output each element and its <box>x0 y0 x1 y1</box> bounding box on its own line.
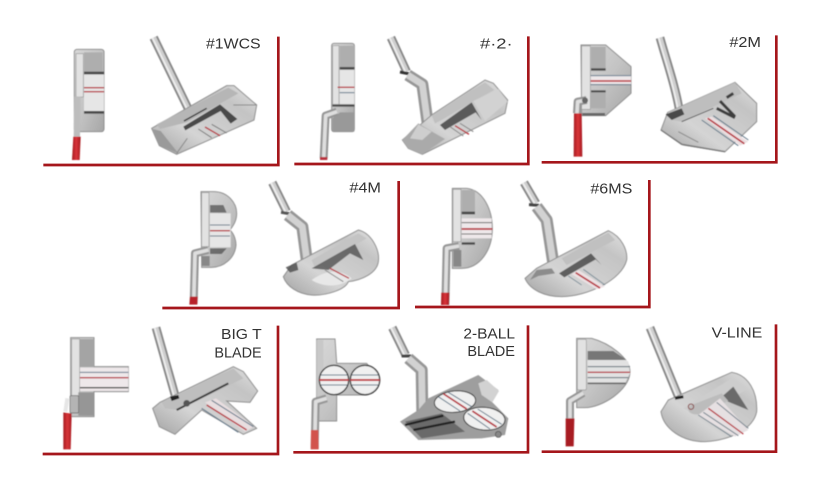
icon: V-LINE perspective view <box>649 328 757 442</box>
icon: #2M front view <box>574 45 631 157</box>
icon: #·2· perspective view <box>390 38 508 154</box>
label: 2-BALL BLADE <box>463 326 515 360</box>
frame <box>162 181 399 308</box>
icon: BIG T BLADE perspective view <box>153 328 258 434</box>
label: #·2·: #·2· <box>480 36 513 52</box>
panel: BIG T BLADE <box>43 326 278 454</box>
label: #6MS: #6MS <box>590 181 633 197</box>
icon: #·2· front view <box>320 43 354 160</box>
panel: #2M <box>542 35 776 162</box>
icon: V-LINE front view <box>566 338 630 446</box>
label: V-LINE: V-LINE <box>712 325 763 341</box>
label: #4M: #4M <box>349 181 381 197</box>
icon: #6MS perspective view <box>523 183 627 297</box>
frame <box>542 324 776 452</box>
panel: #1WCS <box>43 36 278 165</box>
icon: 2-BALL BLADE perspective view <box>391 328 508 440</box>
panel: V-LINE <box>542 324 776 452</box>
icon: #1WCS perspective view <box>152 38 257 154</box>
icon: #6MS front view <box>441 188 492 305</box>
icon: #2M perspective view <box>659 38 757 152</box>
icon: 2-BALL BLADE front view <box>311 339 380 449</box>
label: BIG T BLADE: BIG T <box>221 327 262 343</box>
icon: #4M front view <box>189 192 237 305</box>
label: 2-BALL BLADE: BLADE <box>467 344 515 360</box>
label: BIG T BLADE: BLADE <box>214 346 262 362</box>
frame <box>294 36 528 164</box>
panel: #4M <box>162 181 399 308</box>
frame <box>293 325 528 452</box>
label: #1WCS: #1WCS <box>206 36 261 52</box>
label: #2M: #2M <box>729 35 761 51</box>
frame <box>542 35 776 162</box>
label: BIG T BLADE <box>214 327 262 362</box>
frame <box>43 326 278 454</box>
frame <box>43 37 278 165</box>
icon: BIG T BLADE front view <box>63 338 128 449</box>
icon: #1WCS front view <box>72 49 104 160</box>
label: 2-BALL BLADE: 2-BALL <box>463 326 515 342</box>
icon: #4M perspective view <box>271 183 379 295</box>
panel: #·2· <box>294 36 528 164</box>
frame <box>415 180 649 307</box>
panel: 2-BALL BLADE <box>293 325 528 452</box>
panel: #6MS <box>415 180 649 307</box>
